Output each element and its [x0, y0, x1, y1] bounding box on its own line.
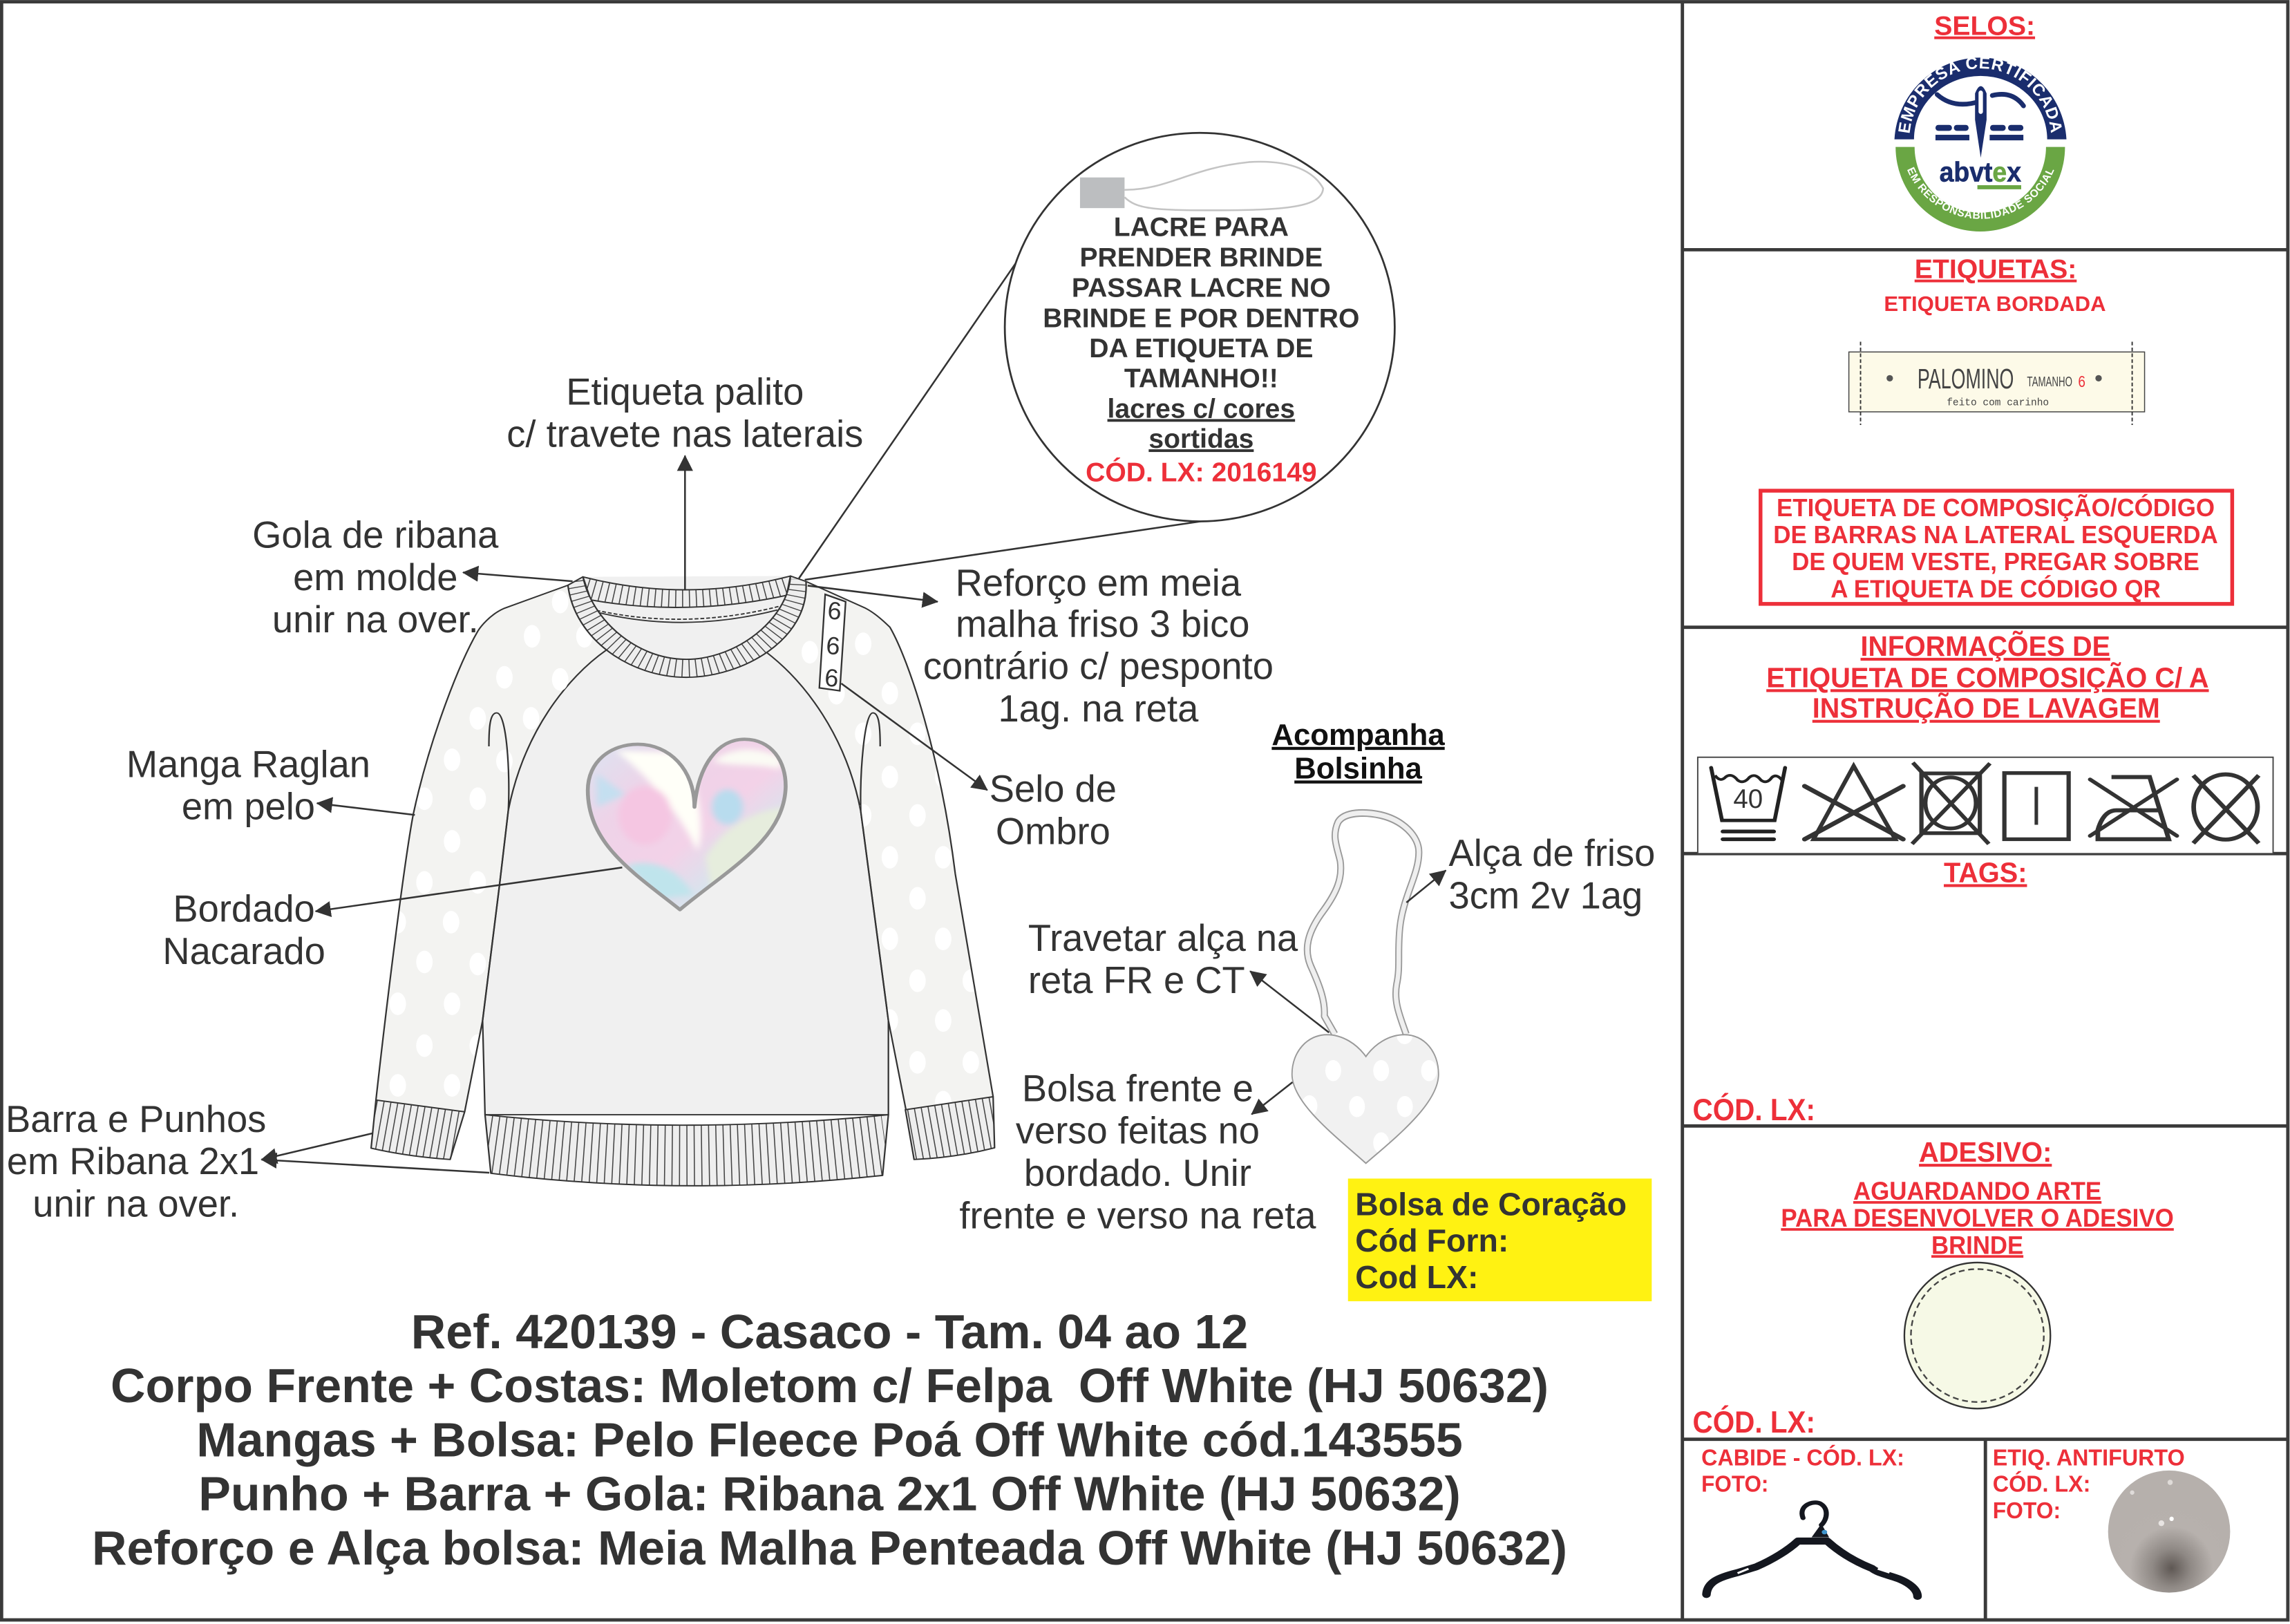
seal instructions: PASSAR LACRE NO [1072, 273, 1331, 303]
note: aguardando arte: PARA DESENVOLVER O ADESIVO [1781, 1204, 2174, 1232]
sleeves [376, 581, 993, 1112]
label: bolsa frente e verso: bordado. Unir [1024, 1152, 1251, 1194]
note: aguardando arte: BRINDE [1931, 1231, 2023, 1259]
title block: materials: Mangas + Bolsa: Pelo Fleece Poá Off White cód.143555 [196, 1413, 1463, 1466]
sleeve outlines [376, 581, 993, 1112]
icon: abvtex certification seal: abvtex [1940, 157, 2022, 188]
icon: hanger [1707, 1502, 1918, 1596]
title block: materials: Punho + Barra + Gola: Ribana 2x1 Off White (HJ 50632) [198, 1467, 1461, 1521]
arrow: gola [463, 572, 573, 581]
collar back rib [583, 576, 791, 607]
shoulder seal tape: 6 [826, 596, 842, 625]
heading: informações: ETIQUETA DE COMPOSIÇÃO C/ A [1766, 661, 2209, 693]
icon: dry flat [2005, 773, 2069, 839]
title block: materials: Reforço e Alça bolsa: Meia Malha Penteada Off White (HJ 50632) [92, 1521, 1567, 1575]
icon: abvtex certification seal: EM RESPONSABILIDADE SOCIAL [1907, 167, 2054, 219]
cuffs [371, 1097, 994, 1160]
arrow: manga [317, 803, 415, 815]
collar front rib [568, 576, 806, 677]
body [482, 650, 889, 1115]
arrow: etiqueta palito [684, 455, 685, 590]
arrow: bordado [316, 867, 622, 912]
label: bordado nacarado: Nacarado [162, 930, 325, 972]
callout: composition label note: A ETIQUETA DE CÓDIGO QR [1830, 574, 2161, 603]
shoulder seal tape: 6 [825, 631, 841, 660]
arrows: barra e punhos [261, 1133, 489, 1173]
label: bolsa frente e verso: Bolsa frente e [1022, 1067, 1253, 1109]
panel: adesivo [1692, 1136, 2174, 1439]
shoulder seal tape [820, 594, 846, 692]
heading: acompanha bolsinha: Acompanha [1271, 718, 1445, 752]
seal instructions: lacres c/ cores [1108, 394, 1295, 424]
label: alça de friso [1449, 832, 1655, 916]
label: travetar alça [1028, 917, 1298, 1001]
neck opening [583, 576, 791, 659]
hem rib [485, 1115, 889, 1186]
text: antifurto: ETIQ. ANTIFURTO [1993, 1446, 2185, 1471]
text: antifurto: CÓD. LX: [1993, 1471, 2090, 1498]
sleeve dots [390, 591, 979, 1113]
text: cabide: FOTO: [1701, 1472, 1768, 1498]
seal instructions: LACRE PARA [1114, 213, 1289, 243]
seal instructions: BRINDE E POR DENTRO [1043, 303, 1359, 333]
icon: holographic heart appliqué [582, 736, 791, 914]
callout: composition label note [1761, 491, 2232, 604]
label: reforço: Reforço em meia [956, 562, 1242, 604]
icon: wash 40: 40 [1733, 784, 1763, 814]
heading: etiquetas: ETIQUETAS: [1915, 255, 2076, 285]
seal instructions: TAMANHO!! [1124, 364, 1278, 394]
callout: bolsa de coração codes: Bolsa de Coração [1355, 1186, 1627, 1222]
icon: no tumble dry [1912, 763, 1990, 844]
icon: no dry clean [2193, 775, 2259, 843]
text: antifurto: FOTO: [1993, 1498, 2061, 1524]
callout lines from garment to zoom circle [799, 260, 1200, 580]
label: gola: Gola de ribana [252, 513, 499, 556]
callout: composition label note: ETIQUETA DE COMPOSIÇÃO/CÓDIGO [1777, 493, 2215, 522]
label: travetar alça: Travetar alça na [1028, 917, 1298, 959]
heading: acompanha bolsinha: Bolsinha [1294, 751, 1423, 785]
panel: informações de lavagem [1698, 630, 2273, 853]
label: gola: em molde [293, 556, 457, 598]
heading: informações [1766, 630, 2209, 724]
seal instructions: CÓD. LX: 2016149 [1086, 457, 1317, 487]
seal instructions: PRENDER BRINDE [1079, 243, 1323, 273]
panel: selos [1895, 12, 2066, 232]
panel: etiqueta antifurto [1993, 1446, 2230, 1593]
icon: security tag ball [2108, 1471, 2230, 1593]
callout: bolsa de coração codes: Cod LX: [1355, 1259, 1478, 1295]
callout: bolsa de coração codes [1348, 1178, 1652, 1301]
care symbols row [1698, 757, 2273, 853]
label: etiqueta palito: c/ travete nas laterais [507, 413, 863, 455]
label: manga raglan [126, 743, 370, 828]
label: barra e punhos: unir na over. [32, 1182, 239, 1225]
note: aguardando arte [1781, 1177, 2174, 1259]
code: adesivo: CÓD. LX: [1692, 1405, 1815, 1439]
heading: acompanha bolsinha [1271, 718, 1445, 785]
label: alça de friso: Alça de friso [1449, 832, 1655, 874]
label: etiqueta palito [507, 370, 863, 455]
label: alça de friso: 3cm 2v 1ag [1449, 874, 1643, 916]
label: bolsa frente e verso: frente e verso na reta [959, 1194, 1316, 1236]
heading: adesivo: ADESIVO: [1919, 1136, 2052, 1168]
icon: abvtex certification seal: EMPRESA CERTIFICADA [1898, 57, 2062, 133]
arrow: selo de ombro [841, 683, 987, 790]
icon: no bleach [1805, 766, 1903, 839]
woven label: TAMANHO [2027, 375, 2072, 390]
label: gola: unir na over. [272, 598, 479, 641]
icon: wash 40 [1711, 768, 1785, 839]
label: selo de ombro [990, 768, 1117, 852]
code: tags: CÓD. LX: [1692, 1093, 1815, 1127]
technical drawing: sweatshirt [371, 576, 994, 1186]
icon: plastic seal tag [1080, 162, 1323, 210]
woven label: feito com carinho [1947, 397, 2049, 408]
subheading: etiqueta bordada: ETIQUETA BORDADA [1884, 292, 2106, 316]
icon: no iron [2090, 777, 2177, 839]
arrow: bolsa [1251, 1082, 1292, 1114]
label: travetar alça: reta FR e CT [1028, 959, 1245, 1001]
bag body [1292, 1026, 1439, 1163]
label: barra e punhos: Barra e Punhos [6, 1098, 266, 1140]
title block: materials [92, 1305, 1567, 1575]
label: manga raglan: em pelo [182, 786, 315, 828]
seal instructions: DA ETIQUETA DE [1089, 334, 1313, 363]
panel: etiquetas [1761, 255, 2232, 604]
title block: materials: Corpo Frente + Costas: Moletom c/ Felpa Off White (HJ 50632) [111, 1359, 1549, 1413]
label: reforço: contrário c/ pesponto [923, 645, 1274, 688]
label: bolsa frente e verso: verso feitas no [1016, 1110, 1260, 1152]
callout: bolsa de coração codes: Cód Forn: [1355, 1222, 1508, 1258]
label: bordado nacarado [162, 887, 325, 972]
woven label [1849, 342, 2145, 425]
technical drawing: heart bag [1292, 813, 1439, 1163]
label: reforço: 1ag. na reta [998, 688, 1199, 730]
text: antifurto [1993, 1446, 2185, 1524]
heading: selos: SELOS: [1934, 12, 2035, 41]
panel: cabide [1701, 1445, 1918, 1596]
icon: abvtex certification seal [1895, 57, 2066, 232]
shoulder seal tape: 6 [824, 663, 840, 692]
panel: tags [1692, 856, 2027, 1127]
label: reforço [923, 562, 1274, 730]
text: cabide [1701, 1445, 1904, 1498]
bag strap [1307, 813, 1419, 1035]
label: etiqueta palito: Etiqueta palito [566, 370, 804, 413]
arrow: travetar [1250, 971, 1329, 1032]
callout: composition label note: DE BARRAS NA LATERAL ESQUERDA [1773, 520, 2218, 549]
label: selo de ombro: Selo de [990, 768, 1117, 810]
note: aguardando arte: AGUARDANDO ARTE [1853, 1177, 2101, 1205]
woven label: 6 [2078, 372, 2085, 390]
zoom circle: seal for gift [1005, 133, 1394, 521]
label: bolsa frente e verso [959, 1067, 1316, 1236]
seal instructions: sortidas [1148, 424, 1253, 454]
woven label: PALOMINO [1918, 363, 2014, 395]
label: manga raglan: Manga Raglan [126, 743, 370, 785]
label: barra e punhos [6, 1098, 266, 1225]
label: gola [252, 513, 499, 641]
heading: tags: TAGS: [1944, 856, 2027, 888]
arrow: alça [1406, 871, 1446, 903]
icon: round sticker [1904, 1263, 2050, 1408]
label: bordado nacarado: Bordado [173, 887, 315, 929]
heading: informações: INSTRUÇÃO DE LAVAGEM [1813, 692, 2160, 724]
title block: materials: Ref. 420139 - Casaco - Tam. 04 ao 12 [411, 1305, 1248, 1359]
heading: informações: INFORMAÇÕES DE [1861, 630, 2110, 662]
seal instructions [1043, 213, 1359, 487]
text: cabide: CABIDE - CÓD. LX: [1701, 1445, 1904, 1471]
label: selo de ombro: Ombro [996, 810, 1110, 852]
label: barra e punhos: em Ribana 2x1 [7, 1140, 259, 1182]
label: reforço: malha friso 3 bico [956, 603, 1249, 645]
arrow: reforço [808, 585, 938, 602]
callout: composition label note: DE QUEM VESTE, PREGAR SOBRE [1792, 547, 2199, 576]
